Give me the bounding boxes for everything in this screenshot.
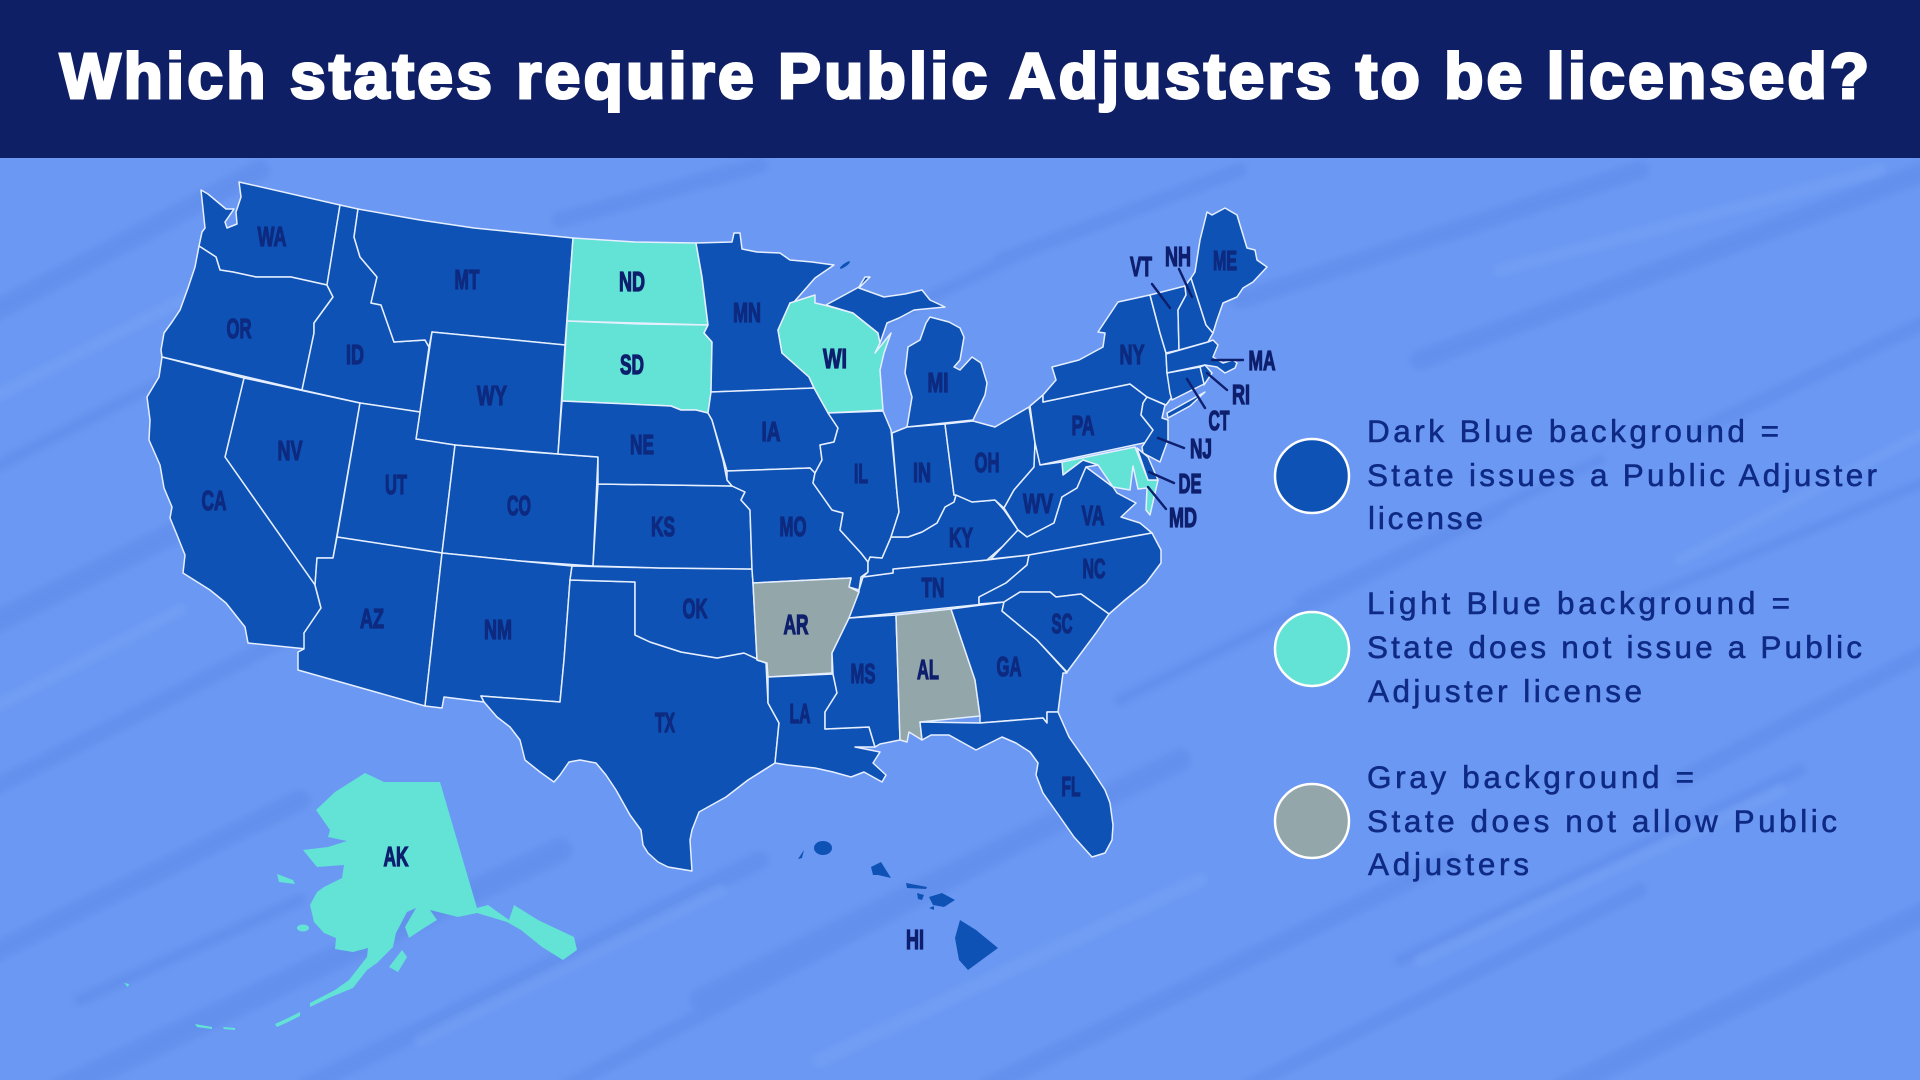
state labels: WA bbox=[258, 221, 286, 252]
state: FL bbox=[920, 712, 1113, 857]
state: NJ bbox=[1141, 397, 1168, 462]
legend bbox=[1275, 413, 1877, 882]
state labels: AZ bbox=[360, 603, 384, 634]
state: MN bbox=[696, 233, 834, 392]
state: WV bbox=[1004, 443, 1098, 537]
legend item: light blue: State does not issue a Public bbox=[1367, 629, 1862, 665]
state labels: GA bbox=[996, 651, 1022, 682]
state: GA bbox=[951, 602, 1067, 723]
state labels: DE bbox=[1178, 468, 1202, 499]
state labels: UT bbox=[385, 469, 407, 500]
US map bbox=[124, 182, 1276, 1030]
state labels: CO bbox=[507, 490, 531, 521]
state: VT bbox=[1150, 286, 1186, 353]
state labels: OK bbox=[682, 593, 708, 624]
state labels: MT bbox=[454, 264, 480, 295]
state: TX bbox=[481, 580, 779, 871]
state: CO bbox=[442, 445, 598, 566]
legend item: gray: Gray background = bbox=[1367, 759, 1694, 795]
state labels: NJ bbox=[1190, 433, 1212, 464]
header bar bbox=[0, 0, 1920, 158]
state labels: MD bbox=[1169, 502, 1197, 533]
state labels: KY bbox=[949, 522, 973, 553]
state: HI bbox=[798, 841, 998, 970]
state labels: NC bbox=[1082, 553, 1106, 584]
state: IN bbox=[891, 424, 956, 537]
state labels: NY bbox=[1120, 339, 1145, 370]
state labels: NE bbox=[630, 429, 654, 460]
state labels: RI bbox=[1232, 379, 1250, 410]
state labels: PA bbox=[1072, 410, 1094, 441]
legend item: light blue: Light Blue background = bbox=[1367, 585, 1790, 621]
state labels: IN bbox=[913, 457, 931, 488]
legend item: light blue bbox=[1275, 585, 1862, 709]
state labels: NV bbox=[278, 435, 303, 466]
state labels: VT bbox=[1130, 251, 1152, 282]
state: ND bbox=[567, 238, 708, 325]
legend item: dark blue: license bbox=[1368, 500, 1483, 536]
state labels: TX bbox=[655, 707, 675, 738]
state labels: WI bbox=[823, 343, 847, 374]
state: WI bbox=[778, 295, 891, 413]
state: AK bbox=[124, 773, 577, 1030]
state: MD bbox=[1062, 447, 1158, 515]
state labels: MA bbox=[1248, 345, 1276, 376]
state labels: CT bbox=[1208, 405, 1230, 436]
state: NH bbox=[1178, 278, 1213, 350]
state: AZ bbox=[298, 537, 442, 706]
state: CT bbox=[1167, 367, 1204, 400]
state: OH bbox=[945, 407, 1035, 508]
state labels: TN bbox=[922, 572, 944, 603]
state: NE bbox=[558, 401, 732, 486]
state labels: HI bbox=[906, 924, 924, 955]
legend item: dark blue: State issues a Public Adjuster bbox=[1367, 457, 1877, 493]
state: CA bbox=[147, 357, 321, 649]
state: TN bbox=[849, 555, 1029, 618]
state labels: CA bbox=[202, 485, 226, 516]
state: PA bbox=[1030, 384, 1153, 465]
state: ID bbox=[302, 205, 429, 412]
state: ME bbox=[1191, 208, 1267, 333]
state: AL bbox=[896, 609, 980, 742]
state: IL bbox=[813, 411, 899, 562]
state: OK bbox=[570, 566, 766, 663]
state labels: ID bbox=[346, 339, 364, 370]
legend item: light blue: Adjuster license bbox=[1368, 673, 1642, 709]
state labels: MS bbox=[850, 658, 876, 689]
state: RI bbox=[1200, 365, 1212, 385]
legend item: gray: Adjusters bbox=[1368, 846, 1529, 882]
state labels: OR bbox=[226, 313, 252, 344]
state: KY bbox=[863, 495, 1018, 577]
legend item: gray bbox=[1275, 759, 1837, 882]
state: NV bbox=[225, 378, 360, 585]
legend item: dark blue bbox=[1275, 413, 1877, 536]
state labels: WY bbox=[477, 380, 507, 411]
state labels: VA bbox=[1082, 500, 1104, 531]
state labels: LA bbox=[790, 698, 810, 729]
state: NM bbox=[425, 553, 572, 708]
state: OR bbox=[161, 246, 333, 390]
state: AR bbox=[753, 578, 859, 677]
state labels: IA bbox=[762, 416, 780, 447]
state: MA bbox=[1166, 340, 1237, 373]
state labels: AR bbox=[784, 609, 808, 640]
state labels: ME bbox=[1213, 245, 1237, 276]
state: IA bbox=[708, 388, 838, 473]
state: NC bbox=[979, 533, 1161, 614]
state: SC bbox=[1002, 592, 1109, 672]
state labels: NH bbox=[1165, 241, 1191, 272]
state labels: MI bbox=[928, 367, 948, 398]
state labels bbox=[202, 221, 1276, 955]
legend item: dark blue: Dark Blue background = bbox=[1367, 413, 1779, 449]
state: SD bbox=[562, 321, 712, 413]
state: DE bbox=[1137, 448, 1158, 480]
state: VA bbox=[991, 467, 1152, 559]
state labels: SD bbox=[620, 349, 644, 380]
state: MO bbox=[727, 468, 868, 590]
state labels: KS bbox=[651, 511, 675, 542]
state labels: AK bbox=[384, 841, 408, 872]
state labels: OH bbox=[974, 447, 1000, 478]
state: MI bbox=[826, 260, 987, 427]
state labels: MN bbox=[733, 297, 761, 328]
state: NY bbox=[1043, 295, 1205, 418]
state: LA bbox=[768, 674, 886, 782]
state: WA bbox=[199, 182, 340, 285]
state labels: ND bbox=[619, 266, 645, 297]
state labels: AL bbox=[917, 654, 939, 685]
state: UT bbox=[337, 403, 455, 553]
state labels: WV bbox=[1023, 488, 1053, 519]
state labels: FL bbox=[1062, 771, 1080, 802]
legend item: gray: State does not allow Public bbox=[1367, 803, 1837, 839]
leader lines bbox=[1148, 269, 1243, 509]
title: Which states require Public Adjusters to be licensed? bbox=[60, 40, 1869, 112]
state labels: IL bbox=[854, 458, 868, 489]
state: WY bbox=[416, 332, 565, 454]
state: MT bbox=[354, 209, 573, 347]
state labels: SC bbox=[1052, 608, 1072, 639]
state labels: NM bbox=[484, 614, 512, 645]
state: MS bbox=[825, 615, 900, 747]
state: KS bbox=[593, 484, 752, 569]
state labels: MO bbox=[780, 511, 806, 542]
